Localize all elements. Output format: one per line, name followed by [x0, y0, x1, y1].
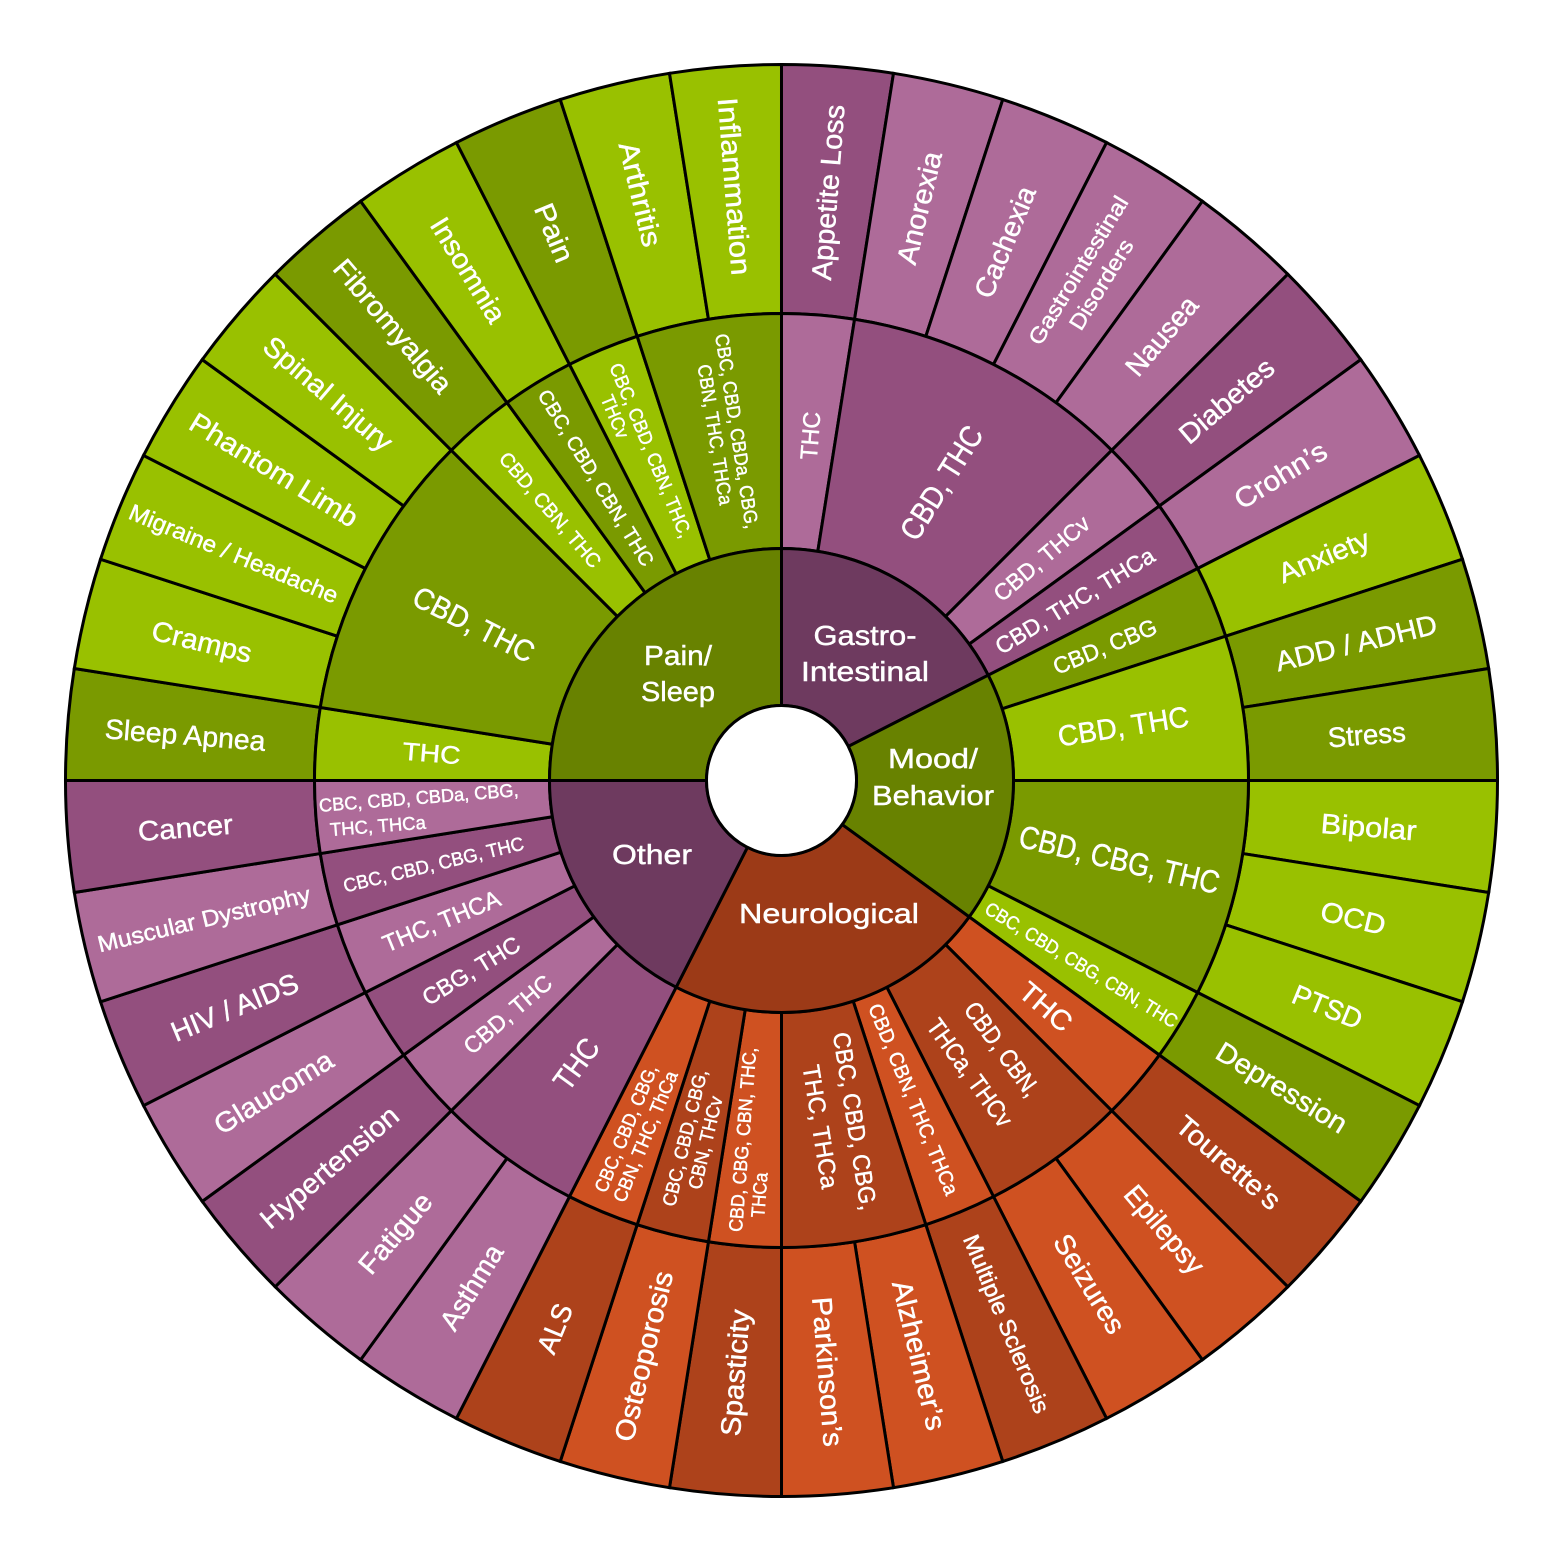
- cannabinoid: CBG, THC: [361, 856, 596, 1055]
- segment: Crohn's: Crohn’s: [1229, 435, 1333, 515]
- cannabinoid: CBC, CBD, CBG, CBN, THC, ThCa: CBN, THC, ThCa: [610, 1068, 683, 1206]
- segment: Gastrointestinal Disorders: [991, 143, 1206, 420]
- segment: Crohn's: [1155, 360, 1427, 600]
- cannabinoid: CBC, CBD, CBG, THC, THCa: [712, 990, 926, 1269]
- segment: Epilepsy: Epilepsy: [1118, 1179, 1211, 1280]
- cannabinoid: THC for asthma and fatigue: THC: [547, 1032, 607, 1097]
- segment: Multiple Sclerosis: Multiple Sclerosis: [958, 1231, 1055, 1417]
- cannabinoid: CBD, THC for gastro conditions: CBD, THC: [893, 419, 990, 546]
- cannabinoid: CBD, THC for ADD and stress: [991, 636, 1270, 850]
- cannabinoid: CBC, CBD, CBG, CBN, THCv: CBN, THCv: [685, 1094, 728, 1192]
- segment: Arthritis: Arthritis: [613, 139, 668, 250]
- segment: Spinal Injury: [202, 269, 474, 509]
- segment: Appetite Loss: Appetite Loss: [806, 103, 851, 281]
- cannabinoid: THC for Tourette's: THC: [1013, 976, 1079, 1038]
- cannabinoid: CBC, CBD, CBG, THC, THCa: THC, THCa: [797, 1063, 843, 1191]
- category: Neurological: Neurological: [739, 898, 919, 929]
- cannabinoid: CBD, CBG: [986, 568, 1231, 742]
- cannabinoid: CBD, CBN, THC: [451, 399, 671, 618]
- segment: Bipolar: [1243, 780, 1498, 892]
- segment: Cachexia: Cachexia: [968, 181, 1042, 303]
- segment: Seizures: Seizures: [1047, 1228, 1132, 1339]
- cannabinoid: CBC, CBD, CBN, THC, THCv: [569, 331, 743, 576]
- cannabinoid: THC for Tourette's: [924, 915, 1159, 1114]
- cannabinoid: CBD, THC for gastro conditions: [811, 319, 1126, 638]
- cannabinoid: THC for sleep apnea: THC: [401, 738, 462, 770]
- category: Other: [492, 717, 766, 987]
- segment: Alzheimer's: [818, 1219, 1003, 1496]
- segment: Anorexia: [854, 73, 1004, 342]
- category: Gastro-Intestinal: Gastro-: [814, 620, 916, 651]
- segment: Stress: [1237, 668, 1506, 819]
- category: Gastro-Intestinal: [782, 548, 988, 746]
- category: Pain/Sleep: [550, 548, 782, 780]
- segment: Sleep Apnea: [65, 668, 320, 780]
- cannabinoid: CBC, CBD, CBDa, CBG, CBN, THC, THCa: CBC, CBD, CBDa, CBG,: [710, 332, 762, 530]
- segment: Nausea: Nausea: [1119, 289, 1205, 382]
- middle ring: cannabinoids: [309, 292, 1270, 1269]
- segment: Tourette's: [1089, 1052, 1361, 1292]
- category: Gastro-Intestinal: Intestinal: [801, 656, 929, 687]
- segment: HIV / AIDS: HIV / AIDS: [166, 967, 303, 1048]
- segment: Pain: Pain: [528, 199, 580, 267]
- cannabinoid: CBC, CBD, CBG, THC, THCa: CBC, CBD, CBG,: [827, 1030, 882, 1212]
- cannabinoid: CBC, CBD, CBDa, CBG, CBN, THC, THCa: [637, 292, 851, 571]
- segment: OCD: OCD: [1317, 895, 1389, 941]
- cannabinoid: CBD, CBN, THCa, THCv: [835, 937, 1112, 1213]
- segment: Insomnia: [361, 135, 601, 407]
- segment: Muscular Dystrophy: [66, 817, 343, 1002]
- segment: Hypertension: Hypertension: [254, 1100, 405, 1235]
- segment: Anxiety: [1192, 455, 1470, 671]
- segment: Gastrointestinal Disorders: Disorders: [1064, 234, 1139, 335]
- cannabinoid: CBD, THC for ADD and stress: CBD, THC: [1056, 701, 1191, 753]
- segment: Pain: [456, 92, 672, 370]
- cannabinoid: CBD, CBN, THCa, THCv: CBD, CBN,: [958, 997, 1045, 1102]
- cannabinoid: CBC, CBD, CBDa, CBG, THC, THCa: THC, THCa: [329, 812, 427, 840]
- cannabinoid: THC for asthma and fatigue: [441, 912, 681, 1197]
- segment: Phantom Limb: Phantom Limb: [184, 407, 364, 533]
- segment: ALS: [454, 1185, 639, 1461]
- segment: Stress: Stress: [1327, 716, 1407, 753]
- segment: Muscular Dystrophy: Muscular Dystrophy: [95, 881, 313, 957]
- cannabinoid: CBC, CBD, CBG, CBN, THC, ThCa: [568, 976, 711, 1225]
- category: Mood/Behavior: [812, 675, 1082, 949]
- cannabinoid: CBD, THC for cramps through spinal injury: CBD, THC: [407, 581, 540, 670]
- category: Mood/Behavior: Behavior: [872, 780, 994, 811]
- cannabinoid: CBD, CBG: CBD, CBG: [1049, 614, 1161, 680]
- cannabinoid: CBC, CBD, CBN, THC: [507, 360, 706, 595]
- segment: Parkinson's: [743, 1236, 894, 1505]
- cannabinoid: CBC, CBD, CBG, CBN, THCv: CBC, CBD, CBG,: [659, 1068, 712, 1209]
- segment: Multiple Sclerosis: [891, 1191, 1107, 1469]
- category: Other: Other: [612, 839, 692, 870]
- cannabinoid: CBD, THC for hypertension: [400, 891, 619, 1111]
- segment: PTSD: [1186, 923, 1462, 1108]
- segment: Fatigue: [270, 1088, 510, 1360]
- cannabinoid: CBC, CBD, CBG, THC: [315, 782, 564, 925]
- category: Mood/Behavior: Mood/: [888, 743, 978, 774]
- cannabinoid: CBD, CBN, THC, THCa: CBD, CBN, THC, THCa: [863, 1001, 962, 1199]
- segment: Gastrointestinal Disorders: Gastrointestinal: [1023, 191, 1133, 349]
- segment: Fibromyalgia: [275, 195, 535, 454]
- segment: Diabetes: Diabetes: [1173, 352, 1280, 450]
- cannabinoid: CBD, CBG, CBN, THC, THCa: CBD, CBG, CBN, THC,: [726, 1047, 761, 1233]
- category: Neurological: [656, 787, 969, 1102]
- segment: Glaucoma: [136, 961, 408, 1201]
- segment: Insomnia: Insomnia: [424, 212, 512, 329]
- segment: Nausea: [1053, 201, 1293, 473]
- cannabinoid: CBD, CBG, THC: [988, 780, 1248, 993]
- segment: Spasticity: [670, 1242, 782, 1496]
- cannabinoid: CBC, CBD, CBG, CBN, THCv: [636, 995, 746, 1242]
- cannabinoid: THC for appetite loss: [782, 314, 855, 551]
- segment: Cramps: Cramps: [149, 615, 255, 669]
- segment: Inflammation: [669, 56, 820, 325]
- cannabinoid: CBD, THC for cramps through spinal injury: [320, 436, 639, 751]
- cannabinoid: CBD, THC, THCa: CBD, THC, THCa: [990, 542, 1159, 659]
- segment: HIV / AIDS: [93, 890, 371, 1106]
- cannabinoid: CBC, CBD, CBDa, CBG, THC, THCa: CBC, CBD, CBDa, CBG,: [318, 779, 519, 816]
- segment: Glaucoma: Glaucoma: [208, 1044, 339, 1141]
- cannabinoid: CBD, CBN, THCa, THCv: THCa, THCv: [921, 1013, 1018, 1133]
- segment: Depression: [1142, 990, 1419, 1205]
- category: Pain/Sleep: Pain/: [644, 640, 712, 671]
- segment: Hypertension: [196, 1027, 455, 1287]
- segment: Tourette's: Tourette’s: [1170, 1109, 1287, 1216]
- cannabinoid: THC for sleep apnea: [314, 707, 552, 780]
- cannabinoid: CBC, CBD, CBG, CBN, THC, ThCa: CBC, CBD, CBG,: [591, 1062, 663, 1196]
- segment: Depression: Depression: [1211, 1036, 1353, 1140]
- segment: Cancer: Cancer: [137, 809, 234, 847]
- segment: Osteoporosis: Osteoporosis: [608, 1268, 679, 1444]
- segment: Fatigue: Fatigue: [352, 1186, 439, 1280]
- cannabinoid: CBC, CBD, CBG, CBN, THC: CBC, CBD, CBG, CBN, THC: [981, 899, 1181, 1033]
- cannabinoid: CBC, CBD, CBG, THC: CBC, CBD, CBG, THC: [341, 834, 526, 897]
- segment: Migraine / Headache: [101, 453, 377, 638]
- segment: Fibromyalgia: Fibromyalgia: [327, 253, 459, 400]
- cannabinoid: CBD, THCv: [944, 450, 1163, 670]
- segment: PTSD: PTSD: [1288, 979, 1367, 1035]
- segment: Cramps: [74, 558, 343, 708]
- cannabinoid: CBD, CBG, THC: CBD, CBG, THC: [1016, 818, 1223, 901]
- segment: ALS: ALS: [531, 1299, 579, 1358]
- cannabinoid: CBD, CBG, CBN, THC, THCa: THCa: [748, 1171, 773, 1218]
- center hole: [706, 706, 856, 856]
- cannabinoid: THC for appetite loss: THC: [796, 411, 826, 461]
- segment: Sleep Apnea: Sleep Apnea: [104, 713, 267, 757]
- cannabinoid: CBC, CBD, CBN, THC, THCv: CBC, CBD, CBN, THC,: [604, 360, 695, 541]
- segment: Anxiety: Anxiety: [1274, 524, 1374, 589]
- segment: Seizures: [962, 1154, 1202, 1426]
- segment: ADD / ADHD: [1220, 559, 1497, 744]
- cannabinoid: CBC, CBD, CBN, THC: CBC, CBD, CBN, THC: [533, 386, 658, 571]
- cannabinoid: CBD, THC for hypertension: CBD, THC: [458, 969, 557, 1059]
- segment: Migraine / Headache: Migraine / Headache: [125, 499, 342, 608]
- cannabinoid: CBG, THC: CBG, THC: [417, 931, 525, 1011]
- cannabinoid: CBD, CBN, THC, THCa: [820, 985, 994, 1230]
- segment: Inflammation: Inflammation: [712, 96, 757, 276]
- segment: Diabetes: [1108, 274, 1367, 534]
- inner ring: categories: [492, 548, 1082, 1102]
- cannabinoid: THC, THCA: [332, 819, 577, 993]
- cannabinoid: CBC, CBD, CBDa, CBG, CBN, THC, THCa: CBN, THC, THCa: [693, 363, 736, 507]
- cannabinoid: CBD, THC, THCa: [967, 506, 1202, 705]
- segment: Phantom Limb: [144, 356, 421, 571]
- cannabinoid: THC, THCA: THC, THCA: [379, 885, 505, 958]
- segment: Cancer: [57, 742, 326, 893]
- segment: Asthma: Asthma: [434, 1238, 510, 1336]
- segment: Asthma: [357, 1141, 572, 1418]
- segment: Parkinson's: Parkinson’s: [806, 1296, 849, 1448]
- segment: OCD: [1220, 853, 1489, 1003]
- segment: Appetite Loss: [782, 64, 894, 319]
- segment: Alzheimer's: Alzheimer’s: [886, 1277, 952, 1433]
- cannabinoid: CBD, THCv: CBD, THCv: [988, 510, 1095, 607]
- cannabinoid: CBD, CBN, THC: CBD, CBN, THC: [494, 448, 605, 573]
- segment: ADD / ADHD: ADD / ADHD: [1272, 609, 1440, 677]
- category: Pain/Sleep: Sleep: [641, 676, 715, 707]
- segment: Epilepsy: [1028, 1107, 1288, 1366]
- segment: Bipolar: Bipolar: [1320, 808, 1418, 846]
- cannabinoid: CBC, CBD, CBDa, CBG, THC, THCa: [309, 744, 555, 854]
- segment: Osteoporosis: [559, 1219, 709, 1488]
- segment: Arthritis: [560, 65, 745, 342]
- cannabinoid: CBD, CBG, CBN, THC, THCa: [708, 1010, 782, 1248]
- segment: Spinal Injury: Spinal Injury: [257, 330, 399, 458]
- segment: Anorexia: Anorexia: [891, 148, 948, 267]
- cannabinoid: CBC, CBD, CBN, THC, THCv: THCv: [596, 392, 633, 442]
- segment: Spasticity: Spasticity: [715, 1308, 756, 1437]
- segment: Cachexia: [924, 100, 1109, 376]
